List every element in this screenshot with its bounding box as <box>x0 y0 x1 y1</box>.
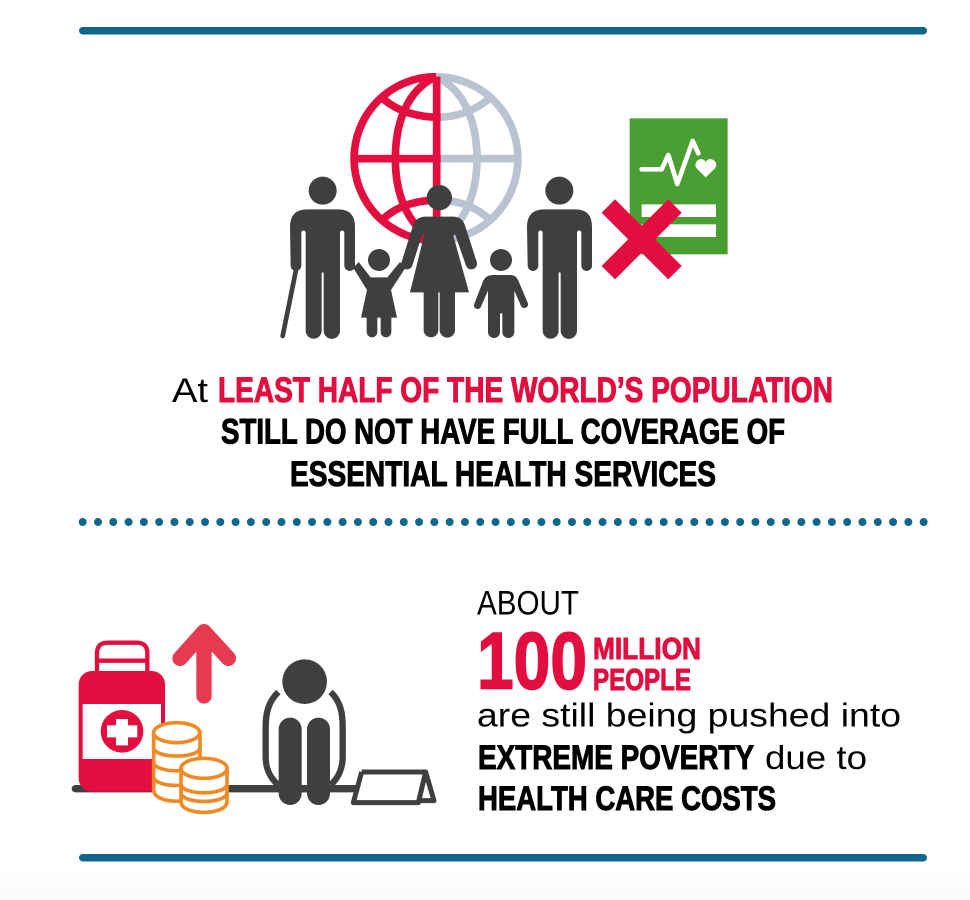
stat: 100: 100 <box>477 616 587 706</box>
icon: red cross mark <box>608 206 675 273</box>
icon: stacked coins <box>154 723 227 812</box>
text: extreme poverty: EXTREME POVERTY <box>478 739 754 777</box>
icon: begging tent sign <box>353 772 434 803</box>
illustration: family, globe and health record <box>283 77 728 339</box>
icon: woman in dress <box>401 185 477 338</box>
text: health care costs: HEALTH CARE COSTS <box>478 780 776 818</box>
text: pushed into: are still being pushed into <box>477 696 901 734</box>
icon: up arrow <box>180 632 228 696</box>
icon: person sitting with head down <box>266 659 343 805</box>
text block: 100 million people <box>477 584 901 818</box>
stat label: million people: PEOPLE <box>593 662 691 697</box>
icon: boy <box>474 249 528 338</box>
text: about: ABOUT <box>477 584 579 622</box>
heading line 2: STILL DO NOT HAVE FULL COVERAGE OF <box>221 412 785 452</box>
heading line 1: At <box>172 372 209 410</box>
heading: half of world's population <box>172 371 833 494</box>
stat label: million people: MILLION <box>593 631 701 666</box>
text: extreme poverty: due to <box>765 739 867 776</box>
dotted divider <box>83 518 924 526</box>
top divider bar <box>79 27 927 34</box>
icon: girl with raised arms <box>353 249 405 337</box>
icon: medicine bottle <box>79 643 165 792</box>
ground line <box>75 778 357 800</box>
icon: man standing right <box>527 177 592 339</box>
heading line 3: ESSENTIAL HEALTH SERVICES <box>290 455 716 494</box>
icon: man with cane <box>283 177 355 339</box>
icon: globe half red half grey <box>354 77 518 241</box>
heading line 1: LEAST HALF OF THE WORLD’S POPULATION <box>218 371 833 410</box>
icon: health record document <box>630 118 728 254</box>
stat label: million people <box>593 631 701 697</box>
illustration: medicine cost and poverty <box>75 632 434 812</box>
bottom divider bar <box>79 854 927 862</box>
